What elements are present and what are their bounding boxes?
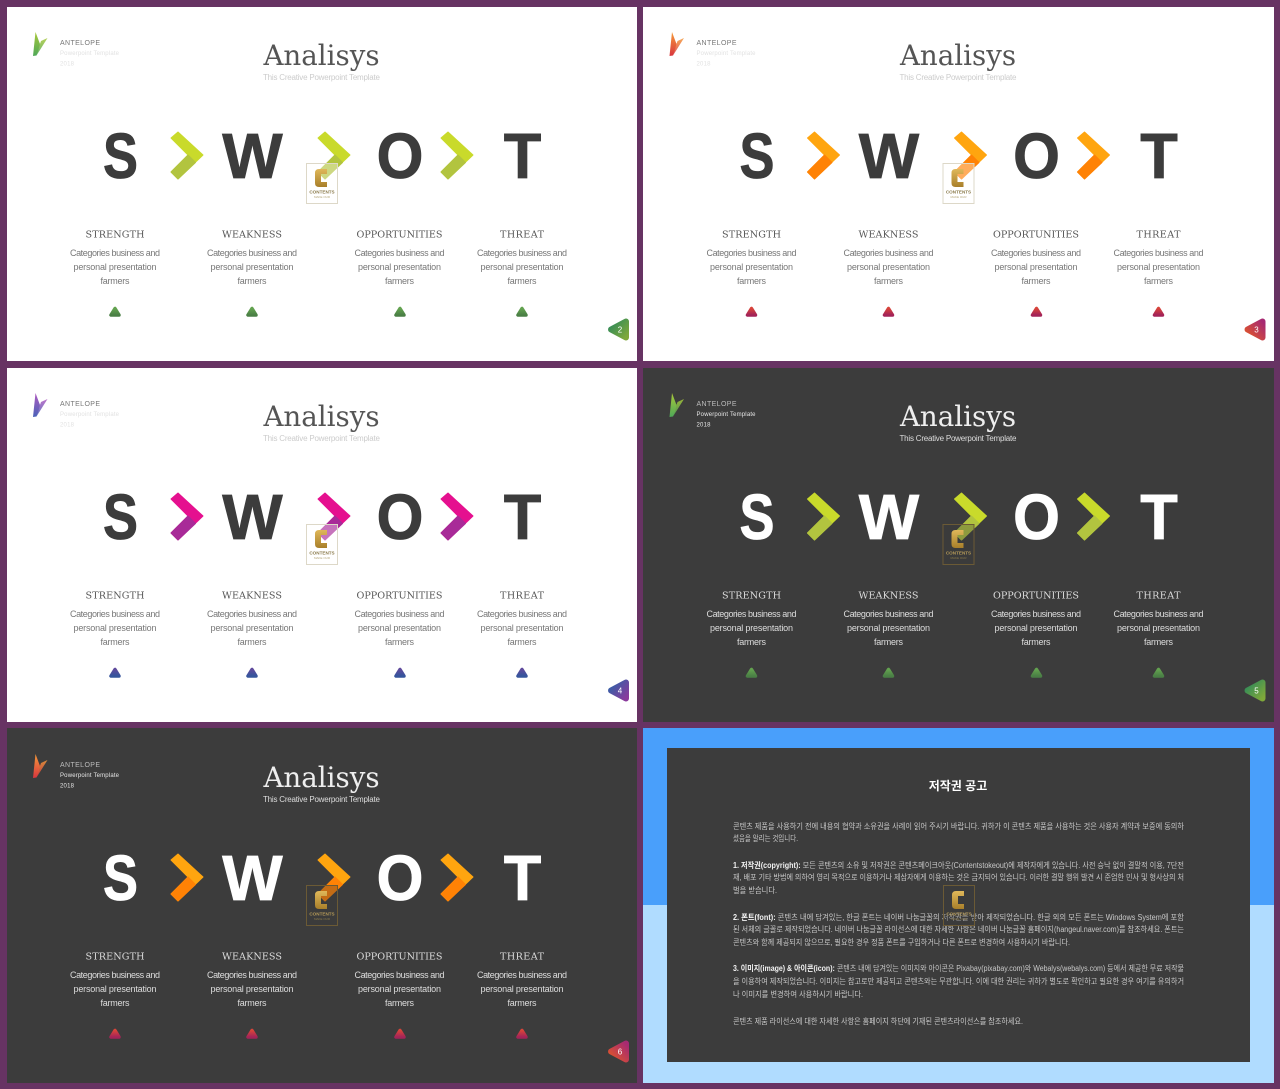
SWOT letters: O: [1013, 121, 1060, 192]
SWOT letters: T: [504, 482, 541, 553]
watermark badge: CONTENTS: [946, 550, 971, 556]
clause 3: image and icon: 을 이용하여 제작되었습니다. 이미지는 참고로만 제공되고 콘텐츠와는 무관합니다. 이에 대한 권리는 귀하가 별도로 확인하고 필요한 경우 여기를 유의하거: [733, 976, 1184, 986]
SWOT letters: W: [222, 842, 283, 914]
brand text: 2018: [696, 62, 711, 68]
brand text: [696, 40, 756, 68]
labels: strength, weakness, opportunities, threat: STRENGTH: [86, 952, 144, 962]
labels: strength, weakness, opportunities, threat: personal presentation: [210, 262, 294, 272]
watermark badge: MAKE OUR: [314, 195, 331, 199]
labels: strength, weakness, opportunities, threat: THREAT: [500, 230, 545, 240]
labels: strength, weakness, opportunities, threat: farmers: [508, 276, 537, 286]
triangle markers: [111, 308, 526, 315]
clause 3: image and icon: 나 이미지를 변경하여 사용하시기 바랍니다.: [733, 989, 863, 999]
labels: strength, weakness, opportunities, threat: farmers: [1022, 276, 1051, 286]
labels: strength, weakness, opportunities, threat: personal presentation: [847, 623, 930, 633]
brand text: [60, 40, 120, 68]
icon: leaf logo: [670, 393, 684, 417]
watermark badge: MAKE OUR: [951, 917, 968, 921]
labels: strength, weakness, opportunities, threat: farmers: [100, 998, 130, 1008]
labels: strength, weakness, opportunities, threat: STRENGTH: [86, 230, 144, 240]
page badge: 5: [1254, 686, 1259, 696]
SWOT letters: S: [739, 121, 775, 192]
SWOT letters: T: [1140, 482, 1178, 553]
labels: strength, weakness, opportunities, threat: THREAT: [1136, 230, 1181, 240]
SWOT letters: [103, 481, 541, 553]
watermark badge: MAKE OUR: [314, 917, 331, 921]
SWOT letters: S: [103, 121, 138, 192]
clause 1: copyright: 벌을 받습니다.: [733, 885, 777, 895]
SWOT letters: S: [739, 482, 775, 553]
page badge: [1248, 682, 1262, 698]
labels: strength, weakness, opportunities, threat: Categories business and: [477, 609, 567, 619]
labels: strength, weakness, opportunities, threat: personal presentation: [358, 623, 441, 633]
labels: strength, weakness, opportunities, threat: Categories business and: [70, 970, 160, 980]
icon: leaf logo: [33, 32, 48, 56]
labels: strength, weakness, opportunities, threat: personal presentation: [994, 262, 1078, 272]
triangle markers: [111, 1030, 526, 1037]
labels: strength, weakness, opportunities, threat: OPPORTUNITIES: [356, 590, 442, 602]
labels: strength, weakness, opportunities, threat: personal presentation: [480, 623, 564, 633]
labels: strength, weakness, opportunities, threat: personal presentation: [74, 262, 156, 272]
brand text: [696, 401, 756, 428]
labels: strength, weakness, opportunities, threat: farmers: [385, 637, 414, 647]
panel: slide 5 dark lime SWOT: [643, 368, 1274, 722]
labels: strength, weakness, opportunities, threat: Categories business and: [70, 248, 160, 258]
heading: This Creative Powerpoint Template: [900, 73, 1017, 82]
SWOT letters: W: [222, 120, 283, 192]
SWOT letters: W: [859, 120, 920, 192]
watermark badge: CONTENTS: [946, 190, 971, 194]
heading: Analisys: [262, 761, 380, 794]
SWOT letters: S: [103, 843, 138, 914]
brand text: 2018: [60, 422, 75, 428]
SWOT letters: S: [103, 482, 138, 553]
labels: strength, weakness, opportunities, threat: STRENGTH: [722, 230, 781, 240]
notice intro: [733, 821, 1185, 843]
labels: strength, weakness, opportunities, threat: personal presentation: [358, 984, 441, 994]
brand text: ANTELOPE: [60, 401, 100, 408]
clause 2: font: [733, 912, 1185, 947]
labels: strength, weakness, opportunities, threat: STRENGTH: [86, 590, 144, 602]
heading: This Creative Powerpoint Template: [263, 434, 381, 443]
labels: strength, weakness, opportunities, threat: Categories business and: [991, 609, 1081, 619]
notice intro: 셨음을 알리는 것입니다.: [733, 833, 798, 843]
brand text: Powerpoint Template: [696, 412, 756, 418]
brand text: [60, 762, 120, 790]
labels: strength, weakness, opportunities, threat: Categories business and: [207, 609, 297, 619]
panel: slide 6 dark orange SWOT: [7, 728, 637, 1083]
SWOT letters: [739, 481, 1178, 553]
labels: strength, weakness, opportunities, threat: personal presentation: [358, 262, 441, 272]
heading: This Creative Powerpoint Template: [900, 434, 1017, 443]
labels: strength, weakness, opportunities, threat: OPPORTUNITIES: [993, 230, 1079, 240]
watermark badge: [943, 164, 974, 204]
notice title: 저작권 공고: [929, 778, 987, 793]
labels: strength, weakness, opportunities, threat: WEAKNESS: [858, 590, 918, 602]
watermark badge: CONTENTS: [309, 190, 335, 194]
SWOT letters: [103, 842, 541, 914]
labels: strength, weakness, opportunities, threat: farmers: [508, 998, 537, 1008]
clause 1: copyright: [733, 860, 1184, 895]
labels: strength, weakness, opportunities, threat: farmers: [385, 998, 414, 1008]
arrow chevrons: [171, 132, 473, 179]
labels: strength, weakness, opportunities, threat: farmers: [238, 276, 267, 286]
page badge: 3: [1254, 326, 1259, 334]
labels: strength, weakness, opportunities, threat: Categories business and: [706, 609, 796, 619]
labels: strength, weakness, opportunities, threat: personal presentation: [74, 623, 156, 633]
SWOT letters: O: [377, 121, 423, 192]
watermark badge: [943, 524, 974, 564]
page badge: [611, 322, 626, 338]
labels: strength, weakness, opportunities, threat: WEAKNESS: [858, 230, 918, 240]
watermark badge: CONTENTS: [309, 550, 335, 556]
SWOT letters: W: [859, 481, 920, 553]
labels: strength, weakness, opportunities, threat: Categories business and: [1114, 248, 1204, 258]
watermark badge: [944, 886, 974, 926]
brand text: Powerpoint Template: [60, 412, 120, 418]
labels: strength, weakness, opportunities, threat: personal presentation: [210, 984, 294, 994]
page badge: 4: [618, 686, 623, 696]
labels: strength, weakness, opportunities, threat: farmers: [385, 276, 414, 286]
labels: strength, weakness, opportunities, threat: Categories business and: [354, 609, 444, 619]
page badge: 6: [618, 1048, 623, 1056]
watermark badge: [306, 164, 338, 204]
icon: leaf logo: [33, 393, 48, 417]
brand text: ANTELOPE: [60, 40, 100, 47]
labels: strength, weakness, opportunities, threat: OPPORTUNITIES: [993, 590, 1079, 602]
labels: strength, weakness, opportunities, threat: personal presentation: [480, 262, 564, 272]
clause 1: copyright: 1. 저작권(copyright): 모든 콘텐츠의 소유 및 저작권은 콘텐츠메이크아웃(Contentstokeout)에 제작자에게 있습니다. 사전 승낙 없이 결말적 이용, 7단전: [733, 860, 1184, 870]
labels: strength, weakness, opportunities, threat: personal presentation: [1117, 623, 1200, 633]
labels: strength, weakness, opportunities, threat: farmers: [238, 637, 267, 647]
brand text: Powerpoint Template: [696, 51, 756, 57]
labels: strength, weakness, opportunities, threat: personal presentation: [994, 623, 1078, 633]
SWOT letters: O: [1013, 482, 1060, 553]
labels: strength, weakness, opportunities, threat: [706, 590, 1204, 647]
labels: strength, weakness, opportunities, threat: Categories business and: [477, 248, 567, 258]
brand text: ANTELOPE: [696, 40, 737, 47]
page badge: [611, 682, 626, 698]
labels: strength, weakness, opportunities, threat: THREAT: [500, 952, 545, 962]
brand text: Powerpoint Template: [60, 51, 120, 57]
arrow chevrons: [808, 132, 1110, 179]
labels: strength, weakness, opportunities, threat: WEAKNESS: [222, 590, 282, 602]
SWOT letters: [103, 120, 541, 192]
SWOT letters: T: [504, 121, 541, 192]
labels: strength, weakness, opportunities, threat: personal presentation: [710, 262, 793, 272]
labels: strength, weakness, opportunities, threat: WEAKNESS: [222, 230, 282, 240]
watermark badge: MAKE OUR: [950, 556, 967, 560]
brand text: Powerpoint Template: [60, 773, 120, 779]
clause 3: image and icon: [733, 963, 1184, 999]
page badge: 2: [618, 326, 623, 334]
icon: leaf logo: [33, 754, 48, 778]
labels: strength, weakness, opportunities, threat: THREAT: [500, 590, 545, 602]
arrow chevrons: [171, 493, 473, 540]
heading: This Creative Powerpoint Template: [263, 73, 381, 82]
page badge: [1248, 322, 1262, 338]
watermark badge: CONTENTS: [946, 912, 972, 916]
panel: copyright notice: [643, 728, 1274, 1083]
watermark badge: MAKE OUR: [314, 556, 331, 560]
labels: strength, weakness, opportunities, threat: WEAKNESS: [222, 952, 282, 962]
panel: slide 3 white orange SWOT: [643, 7, 1274, 361]
labels: strength, weakness, opportunities, threat: OPPORTUNITIES: [356, 230, 442, 240]
labels: strength, weakness, opportunities, threat: personal presentation: [1117, 262, 1200, 272]
labels: strength, weakness, opportunities, threat: Categories business and: [1114, 609, 1204, 619]
labels: strength, weakness, opportunities, threat: Categories business and: [354, 248, 444, 258]
labels: strength, weakness, opportunities, threat: [70, 590, 567, 647]
labels: strength, weakness, opportunities, threat: farmers: [100, 637, 130, 647]
brand text: [60, 401, 120, 428]
license note: 콘텐츠 제품 라이선스에 대한 자세한 사항은 홈페이지 하단에 기재된 콘텐츠라이선스를 참조하세요.: [733, 1016, 1023, 1026]
labels: strength, weakness, opportunities, threat: THREAT: [1136, 590, 1181, 602]
SWOT letters: W: [222, 481, 283, 553]
labels: strength, weakness, opportunities, threat: Categories business and: [844, 609, 934, 619]
clause 2: font: 2. 폰트(font): 콘텐츠 내에 담겨있는, 한글 폰트는 네이버 나눔글꼴의 저작권을 받아 제작되었습니다. 한글 외의 모든 폰트는 Windows System에 포함: [733, 912, 1185, 922]
labels: strength, weakness, opportunities, threat: farmers: [238, 998, 267, 1008]
labels: strength, weakness, opportunities, threat: farmers: [737, 276, 766, 286]
notice card: [667, 748, 1250, 1062]
SWOT letters: T: [1140, 121, 1178, 192]
labels: strength, weakness, opportunities, threat: farmers: [1144, 276, 1174, 286]
brand text: 2018: [60, 784, 75, 790]
labels: strength, weakness, opportunities, threat: personal presentation: [710, 623, 793, 633]
arrow chevrons: [808, 493, 1110, 540]
brand text: 2018: [696, 422, 711, 428]
labels: strength, weakness, opportunities, threat: Categories business and: [354, 970, 444, 980]
triangle markers: [748, 670, 1162, 676]
SWOT letters: O: [377, 482, 423, 553]
labels: strength, weakness, opportunities, threat: personal presentation: [847, 262, 930, 272]
heading: This Creative Powerpoint Template: [263, 795, 381, 804]
labels: strength, weakness, opportunities, threat: farmers: [874, 637, 904, 647]
labels: strength, weakness, opportunities, threat: STRENGTH: [722, 590, 781, 602]
labels: strength, weakness, opportunities, threat: Categories business and: [991, 248, 1081, 258]
labels: strength, weakness, opportunities, threat: farmers: [508, 637, 537, 647]
watermark badge: MAKE OUR: [950, 195, 967, 199]
labels: strength, weakness, opportunities, threat: personal presentation: [480, 984, 564, 994]
labels: strength, weakness, opportunities, threat: farmers: [1144, 637, 1174, 647]
labels: strength, weakness, opportunities, threat: OPPORTUNITIES: [356, 952, 442, 962]
labels: strength, weakness, opportunities, threat: Categories business and: [477, 970, 567, 980]
heading: Analisys: [899, 400, 1016, 433]
heading: Analisys: [899, 39, 1016, 72]
icon: leaf logo: [670, 32, 684, 56]
labels: strength, weakness, opportunities, threat: Categories business and: [207, 248, 297, 258]
watermark badge: CONTENTS: [309, 912, 335, 916]
arrow chevrons: [171, 854, 473, 901]
labels: strength, weakness, opportunities, threat: Categories business and: [844, 248, 934, 258]
labels: strength, weakness, opportunities, threat: farmers: [100, 276, 130, 286]
watermark badge: [306, 886, 338, 926]
watermark badge: [306, 524, 338, 564]
clause 3: image and icon: 3. 이미지(image) & 아이콘(icon): 콘텐츠 내에 담겨있는 이미지와 아이콘은 Pixabay(pixabay.com)와 Webalys(webalys.com) 등에서 제공한 무료 저작물: [733, 963, 1184, 973]
clause 2: font: 된 서체의 글꼴로 제작되었습니다. 네이버 나눔글꼴 라이선스에 대한 자세한 사항은 네이버 나눔글꼴 홈페이지(hangeul.naver.com)를 참조하세요. 폰트는: [733, 924, 1184, 934]
brand text: ANTELOPE: [60, 762, 100, 769]
SWOT letters: O: [377, 843, 423, 914]
heading: Analisys: [262, 39, 380, 72]
page badge: [611, 1044, 626, 1060]
labels: strength, weakness, opportunities, threat: farmers: [1022, 637, 1051, 647]
labels: strength, weakness, opportunities, threat: [70, 230, 567, 286]
labels: strength, weakness, opportunities, threat: personal presentation: [210, 623, 294, 633]
labels: strength, weakness, opportunities, threat: personal presentation: [74, 984, 156, 994]
notice intro: 콘텐츠 제품을 사용하기 전에 내용의 협약과 소유권을 사례이 읽어 주시기 바랍니다. 귀하가 이 콘텐츠 제품을 사용하는 것은 사용자 계약과 보증에 동의하: [733, 821, 1185, 831]
SWOT letters: [739, 120, 1178, 192]
triangle markers: [748, 308, 1162, 315]
labels: strength, weakness, opportunities, threat: Categories business and: [70, 609, 160, 619]
triangle markers: [111, 670, 526, 676]
brand text: 2018: [60, 62, 75, 68]
labels: strength, weakness, opportunities, threat: Categories business and: [706, 248, 796, 258]
clause 1: copyright: 재, 배포 기타 방법에 의하여 영리 목적으로 이용하거나 제삼자에게 이용하는 것은 금지되어 있습니다. 이러한 결말 행위 발견 시 준엄한 민사 및 형사상의 처: [733, 872, 1184, 882]
clause 2: font: 콘텐츠와 함께 제공되지 않으므로, 필요한 경우 정품 폰트를 구입하거나 다른 폰트로 변경하여 사용하시기 바랍니다.: [733, 937, 1070, 947]
brand text: ANTELOPE: [696, 401, 737, 408]
SWOT letters: T: [504, 843, 541, 914]
labels: strength, weakness, opportunities, threat: [706, 230, 1204, 286]
labels: strength, weakness, opportunities, threat: Categories business and: [207, 970, 297, 980]
labels: strength, weakness, opportunities, threat: [70, 952, 567, 1008]
labels: strength, weakness, opportunities, threat: farmers: [737, 637, 766, 647]
panel: slide 2 white lime SWOT: [7, 7, 637, 361]
panel: slide 4 white magenta SWOT: [7, 368, 637, 722]
heading: Analisys: [262, 400, 380, 433]
labels: strength, weakness, opportunities, threat: farmers: [874, 276, 904, 286]
